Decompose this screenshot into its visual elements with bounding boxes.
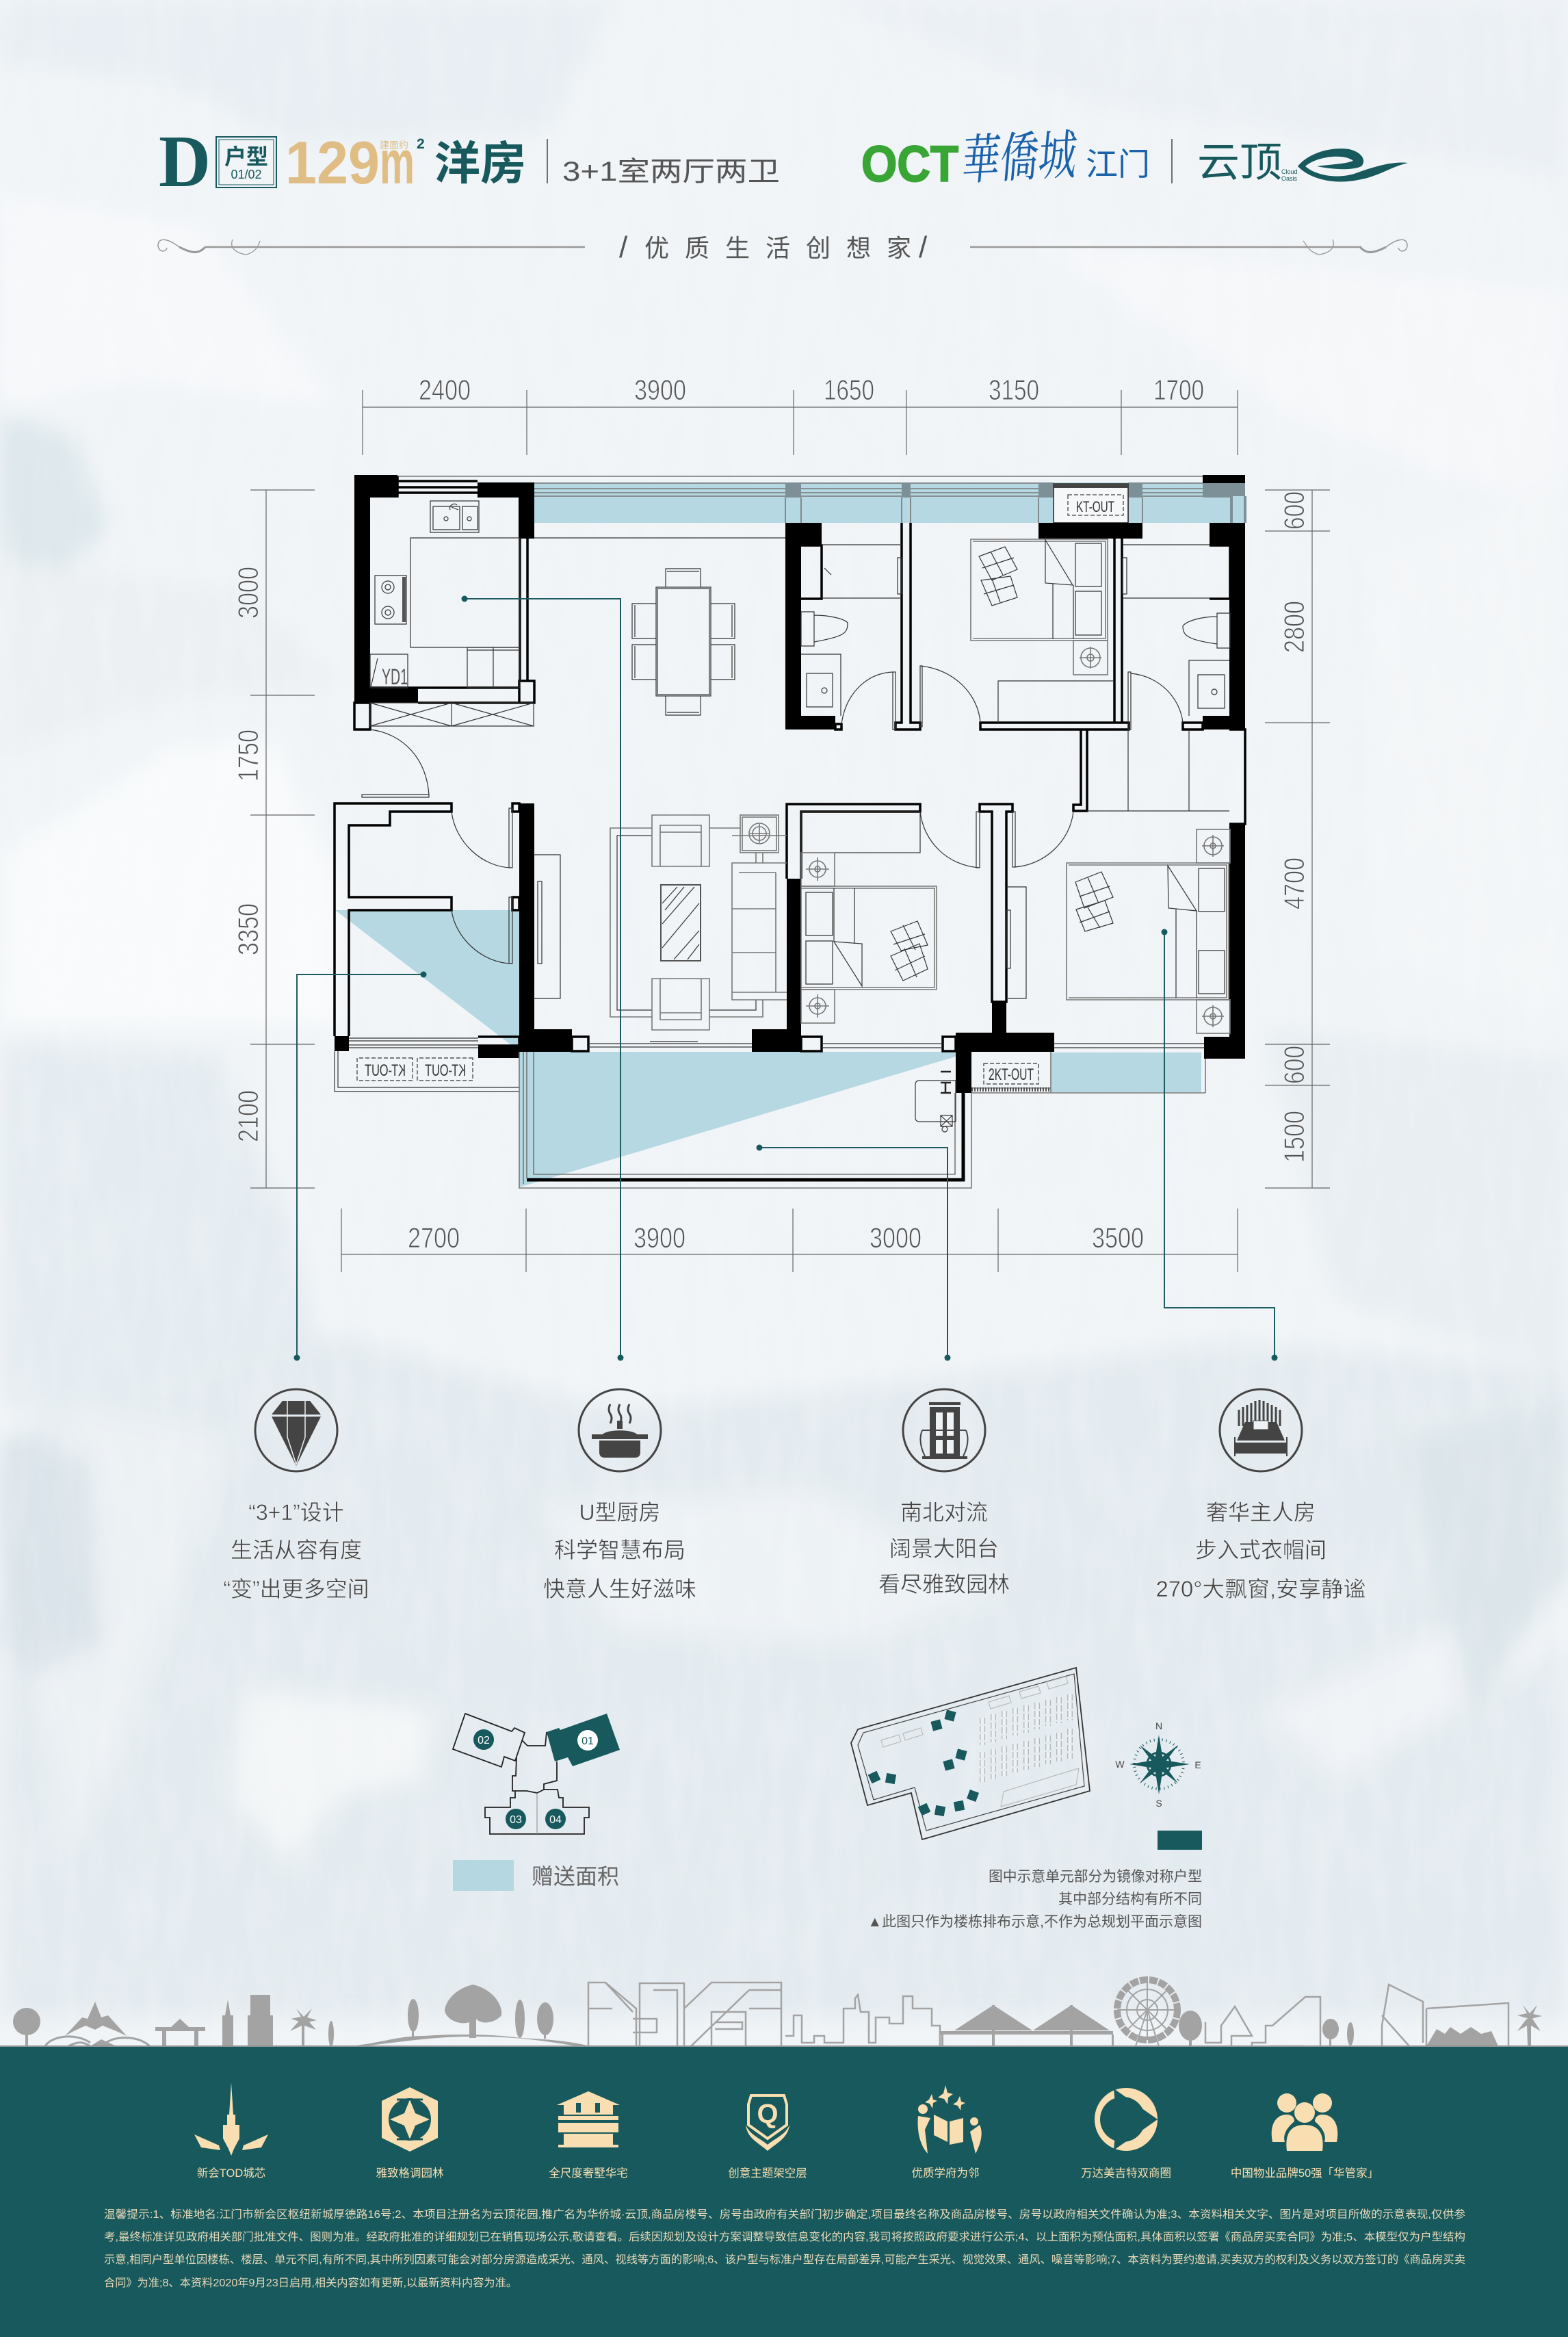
leader line: balcony <box>757 1144 951 1360</box>
modern buildings line art <box>588 1983 781 2046</box>
footer feature: residence: 全尺度奢墅华宅 <box>549 2167 628 2180</box>
bottom dimension bar: 3000 <box>870 1222 922 1254</box>
header: brand logos <box>861 112 1408 195</box>
landmarks left <box>13 1985 590 2047</box>
feature 1: 3+1 design: 生活从容有度 <box>231 1538 362 1562</box>
slogan: / <box>919 231 928 264</box>
doors <box>362 666 1183 964</box>
footer feature: TOD: 新会TOD城芯 <box>197 2167 265 2180</box>
footer feature: garden <box>376 2087 444 2180</box>
armchairs <box>652 815 709 866</box>
bottom dimension bar: 2700 <box>408 1222 460 1254</box>
disclaimer text: 合同》为准;8、本资料2020年9月23日启用,相关内容如有更新,以最新资料内容为准。 <box>104 2277 517 2289</box>
area figure: 129 <box>285 129 380 196</box>
left bay window <box>335 1051 519 1092</box>
walk-in wardrobe <box>1087 729 1229 811</box>
bedroom 2 <box>801 812 937 1023</box>
icon: play ring <box>1095 2088 1158 2151</box>
gifted area: north balcony strip <box>534 482 1245 523</box>
south balcony <box>519 1052 971 1188</box>
disclaimer text: 示意,相同户型单位因楼栋、楼层、单元不同,有所不同,其中所列因素可能会对部分房源造成采光、通风、视线等方面的影响;6、该户型与标准户型存在局部差异,可能产生采光、视觉效果、通风、噪音等影响;7、本资料为要约邀请,买卖双方的权利及义务以双方签订的《商品房买卖 <box>104 2253 1465 2266</box>
disclaimer text: 温馨提示:1、标准地名:江门市新会区枢纽新城厚德路16号;2、本项目注册名为云顶花园,推广名为华侨城·云顶,商品房楼号、房号由政府有关部门初步确定,项目最终名称及商品房楼号、房号以政府相关文件确认为准;3、本资料相关文字、图片是对项目所做的示意表现,仅供参 <box>104 2208 1465 2221</box>
footer feature: schools <box>911 2085 982 2180</box>
AC unit north: KT-OUT <box>1076 498 1114 515</box>
right dimension bar: 2800 <box>1278 601 1310 653</box>
header: unit title <box>159 121 780 203</box>
unit 04: 04 <box>549 1814 562 1826</box>
compass <box>1115 1720 1201 1809</box>
disclaimer text: 考,最终标准详见政府相关部门批准文件、图则为准。经政府批准的详细规划已在销售现场公示,敬请查看。后续因规划及设计方案调整导致信息变化的内容,我司将按照政府要求进行公示;4、以上面积为预估面积,具体面积以签署《商品房买卖合同》为准;5、本模型仅为户型结构 <box>104 2231 1465 2243</box>
feature 4: master bedroom: 步入式衣帽间 <box>1195 1538 1327 1562</box>
icon: three people <box>1272 2093 1337 2151</box>
leader line: 3+1 <box>294 972 427 1360</box>
feature 3: north-south airflow: 南北对流 <box>900 1500 988 1525</box>
building key plan <box>453 1714 620 1834</box>
north balcony rail <box>397 476 1245 538</box>
disclaimer text <box>104 2208 1465 2289</box>
ferris wheel <box>1117 1980 1177 2046</box>
unit 03: 03 <box>510 1814 522 1826</box>
floor plan <box>335 475 1245 1188</box>
feature 2: U kitchen: U型厨房 <box>579 1500 661 1525</box>
icon: people and stars <box>918 2085 982 2154</box>
ornamental divider right <box>970 240 1407 255</box>
calligraphy brand name: 華僑城 <box>959 112 1081 195</box>
icon: balcony door <box>903 1389 985 1471</box>
footer feature: TOD <box>194 2082 268 2180</box>
title: villa type: 洋房 <box>434 138 526 190</box>
unit letter D: D <box>159 121 211 203</box>
top dimension bar: 2400 <box>419 374 471 406</box>
side table <box>740 815 779 863</box>
unit type badge: 01/02 <box>231 168 262 181</box>
living room set <box>534 815 787 1030</box>
footer feature: residence <box>549 2091 628 2180</box>
wing 01 highlighted <box>547 1714 620 1766</box>
leader line: kitchen <box>461 595 624 1360</box>
feature 3: north-south airflow: 阔景大阳台 <box>889 1536 999 1561</box>
left dimension bar: 1750 <box>232 729 264 782</box>
wing 02 <box>453 1714 525 1767</box>
gifted area: south balcony triangle <box>519 1052 971 1187</box>
icon: star gem <box>382 2087 438 2152</box>
low-rise housing rows <box>881 1677 1079 1807</box>
icon: tower with wings <box>194 2082 268 2156</box>
left dimension bar <box>232 490 315 1188</box>
icon: bed <box>1220 1389 1302 1471</box>
main bedroom <box>1067 729 1230 1033</box>
city silhouette line <box>785 1995 940 2046</box>
bottom dimension bar: 3900 <box>633 1222 685 1254</box>
icon: Q shield: Q <box>757 2099 779 2129</box>
wing 01 highlighted: 01 <box>582 1735 594 1747</box>
project name: 云顶 <box>1197 140 1282 185</box>
feature 1: 3+1 design: “变”出更多空间 <box>223 1577 369 1601</box>
site plan <box>851 1668 1090 1839</box>
unit type badge <box>216 137 276 188</box>
sofa <box>732 863 787 1000</box>
structural walls <box>335 475 1245 1093</box>
leader line: master bedroom <box>1162 929 1278 1360</box>
footer feature: garden: 雅致格调园林 <box>376 2167 444 2180</box>
coffee table <box>661 885 701 961</box>
skyline <box>0 1980 1568 2048</box>
top dimension bar: 1650 <box>824 374 874 406</box>
footer feature: property management: 中国物业品牌50强「华管家」 <box>1231 2167 1378 2180</box>
feature 4: master bedroom: 奢华主人房 <box>1206 1500 1316 1525</box>
south-east bay <box>971 1052 1205 1093</box>
footer feature: ground floor <box>728 2095 807 2180</box>
top dimension bar <box>363 374 1238 455</box>
left bay window: KT-OUT <box>365 1061 406 1080</box>
slogan: 优质生活创想家 <box>644 234 927 262</box>
bottom dimension bar <box>341 1209 1238 1272</box>
feature 2: U kitchen: 科学智慧布局 <box>554 1538 685 1562</box>
cable-stayed bridge <box>940 2005 1114 2046</box>
footer band <box>0 2047 1568 2337</box>
footer feature: commerce <box>1081 2088 1171 2180</box>
right dimension bar: 4700 <box>1278 857 1310 909</box>
highlighted towers <box>868 1709 979 1816</box>
bottom dimension bar: 3500 <box>1092 1222 1144 1254</box>
right dimension bar: 600 <box>1278 1046 1310 1084</box>
wing 02: 02 <box>478 1735 490 1746</box>
left dimension bar: 3000 <box>232 567 264 619</box>
right dimension bar: 1500 <box>1278 1111 1310 1163</box>
footer feature: schools: 优质学府为邻 <box>911 2167 980 2180</box>
legend: gifted area <box>453 1860 619 1891</box>
landmarks right <box>1179 2005 1542 2046</box>
slogan: / <box>619 231 628 264</box>
site plan notes: 其中部分结构有所不同 <box>1058 1891 1202 1907</box>
top dimension bar: 1700 <box>1153 374 1204 406</box>
footer feature: commerce: 万达美吉特双商圈 <box>1081 2167 1171 2180</box>
feature 3: north-south airflow <box>878 1389 1010 1597</box>
bathroom right <box>1123 545 1230 716</box>
OCT logo: OCT <box>861 135 958 192</box>
project English name <box>1281 168 1298 182</box>
area figure: 2 <box>417 136 425 152</box>
dining set <box>632 569 735 715</box>
legend: gifted area: 赠送面积 <box>532 1864 619 1889</box>
unit 03 <box>506 1809 526 1829</box>
top dimension bar: 3900 <box>634 374 686 406</box>
footer feature: property management <box>1231 2093 1378 2180</box>
kitchen fixtures <box>370 501 534 726</box>
area figure: 建面约 <box>380 140 408 151</box>
feature 4: master bedroom: 270°大飘窗,安享静谧 <box>1156 1577 1366 1601</box>
icon: steaming pot <box>579 1389 661 1471</box>
compass: S <box>1155 1798 1162 1809</box>
bedroom 3 <box>971 539 1114 723</box>
compass: N <box>1155 1720 1162 1731</box>
core outline <box>485 1732 589 1834</box>
rug <box>610 828 787 1017</box>
project English name: Cloud <box>1281 168 1298 175</box>
legend: teal swatch <box>1158 1831 1202 1850</box>
feature 1: 3+1 design: “3+1”设计 <box>248 1500 344 1525</box>
site plan notes: ▲此图只作为楼栋排布示意,不作为总规划平面示意图 <box>867 1914 1202 1930</box>
feature 2: U kitchen: 快意人生好滋味 <box>543 1577 696 1601</box>
feature 3: north-south airflow: 看尽雅致园林 <box>878 1572 1010 1597</box>
footer feature: ground floor: 创意主题架空层 <box>728 2167 807 2180</box>
compass: W <box>1115 1759 1125 1770</box>
icon: villa <box>557 2091 620 2147</box>
AC unit north <box>1054 484 1128 523</box>
feature 4: master bedroom <box>1156 1389 1366 1601</box>
left dimension bar: 3350 <box>232 903 264 955</box>
ornamental divider left <box>158 240 585 255</box>
area figure: m <box>380 129 415 197</box>
icon: diamond <box>255 1389 337 1471</box>
top dimension bar: 3150 <box>989 374 1039 406</box>
left bay window: KT-OUT <box>425 1061 466 1080</box>
city name: 江门 <box>1086 146 1150 182</box>
bathroom left <box>801 545 902 716</box>
gifted area: left bay triangle <box>335 910 519 1051</box>
kitchen fixtures: YD1 <box>382 664 408 689</box>
layout description: 3+1室两厅两卫 <box>562 157 780 187</box>
eye logo <box>1298 149 1408 182</box>
gifted area: south-east strip <box>1051 1053 1201 1092</box>
south-east bay: 2KT-OUT <box>989 1066 1034 1084</box>
partition walls <box>335 476 1245 1051</box>
site plan notes: 图中示意单元部分为镜像对称户型 <box>989 1869 1202 1885</box>
wardrobe bedroom 2 <box>1006 887 1026 998</box>
TV unit <box>534 855 560 998</box>
feature 2: U kitchen <box>543 1389 696 1601</box>
unit 04 <box>545 1809 566 1829</box>
feature 1: 3+1 design <box>223 1389 369 1601</box>
right dimension bar: 600 <box>1278 491 1310 530</box>
right dimension bar <box>1265 490 1330 1188</box>
compass: E <box>1194 1759 1201 1770</box>
site plan notes <box>867 1869 1202 1930</box>
unit type badge: 户型 <box>224 144 268 169</box>
project English name: Oasis <box>1281 175 1298 182</box>
left dimension bar: 2100 <box>232 1090 264 1142</box>
